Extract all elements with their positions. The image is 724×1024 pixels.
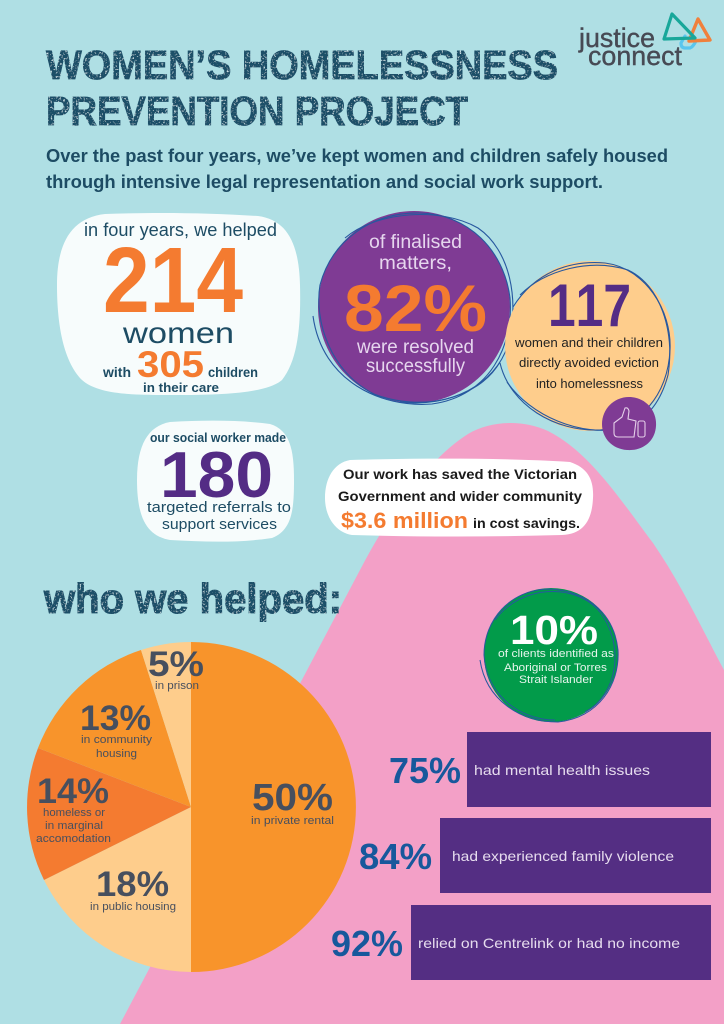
- panel: 214 women helped: women: [122, 317, 234, 350]
- panel: 180 referrals: support services: [162, 517, 277, 533]
- panel: 10% Aboriginal or Torres Strait Islander: 10%: [510, 607, 598, 653]
- panel: 180 referrals: 180: [160, 438, 273, 511]
- label: 50% in private rental: 50%: [252, 777, 333, 819]
- slice: 5% prison: [141, 642, 191, 807]
- panel: 214 women helped: 214: [103, 228, 243, 332]
- label: 14% homeless or in marginal accomodation: homeless or: [43, 807, 105, 819]
- intro text: through intensive legal representation and social work support.: [46, 172, 603, 192]
- intro text: [46, 146, 668, 192]
- panel: 214 women helped: with: [102, 364, 131, 380]
- logo: justice connect: justice: [578, 23, 655, 53]
- slice: 18% public housing: [44, 807, 191, 972]
- panel: cost savings: in cost savings.: [473, 515, 580, 531]
- title: PREVENTION PROJECT: [46, 88, 468, 134]
- stat: 75% mental health: 75%: [389, 750, 461, 791]
- stat: 75% mental health: [389, 732, 711, 807]
- slice: 50% private rental: [191, 642, 356, 972]
- panel: 214 women helped: 305: [137, 344, 204, 385]
- stat: 84% family violence: [359, 818, 711, 893]
- panel: cost savings: Government and wider community: [338, 488, 582, 504]
- panel: 82% resolved successfully: of finalised: [369, 232, 462, 253]
- panel: 117 avoided eviction: into homelessness: [536, 377, 643, 391]
- slice: 13% community housing: [38, 650, 191, 807]
- panel: 117 avoided eviction: [500, 261, 675, 431]
- label: 14% homeless or in marginal accomodation: accomodation: [36, 833, 111, 845]
- label: 14% homeless or in marginal accomodation: 14%: [37, 772, 109, 811]
- stat: 84% family violence: 84%: [359, 836, 432, 877]
- label: 14% homeless or in marginal accomodation: [36, 772, 111, 845]
- label: 50% in private rental: in private rental: [251, 815, 334, 827]
- panel: 180 referrals: targeted referrals to: [147, 500, 291, 516]
- panel: 117 avoided eviction: women and their children: [514, 336, 663, 350]
- panel: 214 women helped: in their care: [143, 380, 219, 395]
- scribble outline purple circle: [313, 213, 513, 404]
- label: 18% in public housing: 18%: [96, 865, 169, 904]
- stat: 92% Centrelink or no income: relied on Centrelink or had no income: [418, 935, 680, 951]
- label: 13% in community housing: [80, 699, 153, 760]
- logo: justice connect: connect: [588, 41, 682, 71]
- scribble outline orange circle: [500, 263, 670, 430]
- stat: 75% mental health: had mental health issues: [474, 762, 650, 778]
- panel: cost savings: [325, 459, 593, 536]
- icon: thumbs up: [602, 397, 656, 450]
- intro text: Over the past four years, we’ve kept women and children safely housed: [46, 146, 668, 166]
- label: 5% in prison: in prison: [155, 680, 199, 692]
- panel: cost savings: Our work has saved the Victorian: [343, 466, 577, 482]
- label: 5% in prison: 5%: [148, 645, 204, 684]
- panel: cost savings: $3.6 million: [341, 508, 468, 533]
- panel: 10% Aboriginal or Torres Strait Islander: [480, 588, 618, 722]
- panel: 180 referrals: our social worker made: [150, 431, 286, 445]
- logo: justice connect: [578, 14, 710, 71]
- panel: 10% Aboriginal or Torres Strait Islander: Strait Islander: [519, 674, 593, 686]
- label: 13% in community housing: housing: [96, 748, 137, 760]
- label: 13% in community housing: in community: [81, 734, 153, 746]
- stat: 84% family violence: had experienced family violence: [452, 848, 674, 864]
- title: [46, 42, 558, 134]
- stat: 92% Centrelink or no income: 92%: [331, 923, 403, 964]
- scribble outline green circle: [480, 589, 618, 722]
- panel: 82% resolved successfully: 82%: [344, 271, 487, 345]
- label: 13% in community housing: 13%: [80, 699, 151, 738]
- panel: 10% Aboriginal or Torres Strait Islander: Aboriginal or Torres: [504, 662, 608, 674]
- panel: 82% resolved successfully: successfully: [366, 356, 465, 377]
- panel: 214 women helped: children: [208, 364, 258, 380]
- label: 18% in public housing: in public housing: [90, 901, 176, 913]
- title: WOMEN’S HOMELESSNESS: [46, 42, 558, 88]
- label: 14% homeless or in marginal accomodation: in marginal: [45, 820, 103, 832]
- stat: 92% Centrelink or no income: [331, 905, 711, 980]
- label: 18% in public housing: [90, 865, 176, 913]
- panel: 82% resolved successfully: were resolved: [356, 337, 474, 358]
- panel: 117 avoided eviction: directly avoided eviction: [519, 356, 659, 370]
- pie chart: who we helped: [27, 642, 356, 972]
- panel: 214 women helped: [57, 213, 300, 395]
- panel: 214 women helped: in four years, we helped: [84, 220, 277, 240]
- heading: who we helped: who we helped:: [43, 575, 342, 622]
- panel: 10% Aboriginal or Torres Strait Islander: of clients identified as: [498, 648, 615, 660]
- panel: 180 referrals: [137, 421, 294, 542]
- pink background hill: [120, 423, 724, 1024]
- panel: 117 avoided eviction: 117: [548, 272, 631, 339]
- slice: 14% homeless or marginal: [27, 748, 191, 880]
- panel: 82% resolved successfully: matters,: [379, 253, 452, 274]
- panel: 82% resolved successfully: [313, 211, 513, 404]
